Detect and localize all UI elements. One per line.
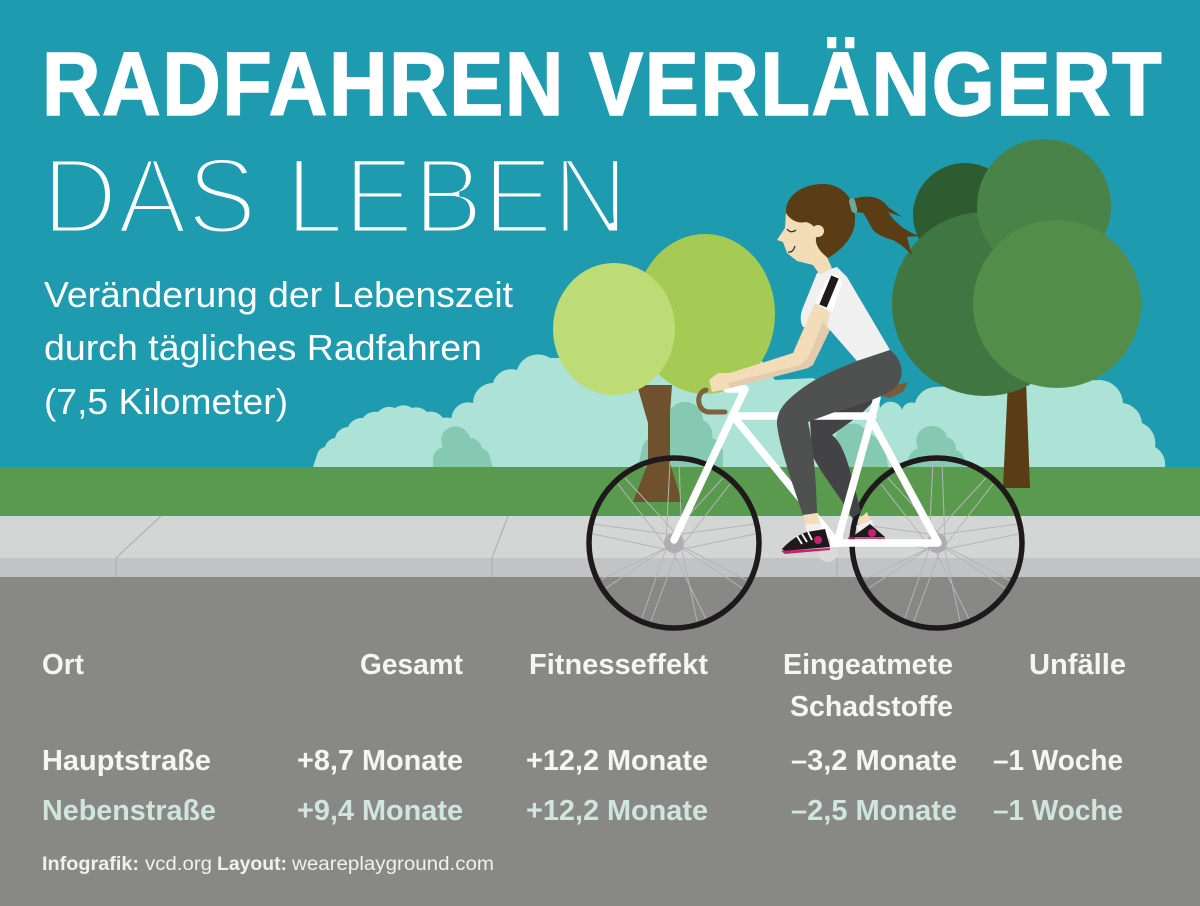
table header row (42, 649, 1126, 723)
small bush: behind frame (822, 424, 888, 467)
credits: vcd.org (145, 854, 212, 875)
credits (42, 854, 494, 875)
rider: front ankle and shoe (781, 513, 843, 554)
subtitle: durch tägliches Radfahren (44, 327, 482, 368)
tree: right trunk (1003, 380, 1030, 488)
small bush: left (433, 426, 493, 467)
rider: back leg (810, 395, 880, 534)
table row: Hauptstraße: –3,2 Monate (791, 745, 957, 777)
bicycle down tube (733, 416, 837, 543)
subtitle: Veränderung der Lebenszeit (44, 274, 513, 315)
rider: sleeve (815, 274, 842, 312)
table row: Nebenstraße (42, 795, 1123, 827)
rider: torso (801, 267, 890, 361)
road (0, 577, 1200, 906)
table row: Nebenstraße: –1 Woche (993, 795, 1123, 827)
pedal and crank (818, 542, 838, 562)
rider: head (777, 184, 920, 275)
table header row: Eingeatmete (783, 649, 953, 681)
table row: Hauptstraße: +12,2 Monate (526, 745, 708, 777)
subtitle (44, 274, 513, 422)
sidewalk (0, 516, 1200, 577)
table header row: Ort (42, 649, 84, 681)
rider: back shoe (848, 524, 885, 538)
credits: Infografik: (42, 854, 139, 875)
small bush: behind front wheel (638, 402, 723, 467)
hedge: large background (451, 354, 1165, 467)
table header row: Gesamt (360, 649, 463, 681)
table row: Hauptstraße: Hauptstraße (42, 745, 211, 777)
table row: Nebenstraße: –2,5 Monate (791, 795, 957, 827)
tree: right crown (892, 139, 1141, 396)
table header row: Unfälle (1029, 649, 1126, 681)
handlebar (699, 390, 725, 412)
table row: Nebenstraße: Nebenstraße (42, 795, 216, 827)
table row: Nebenstraße: +12,2 Monate (526, 795, 708, 827)
table header row: Fitnesseffekt (529, 649, 708, 681)
table row: Hauptstraße: –1 Woche (993, 745, 1123, 777)
credits: weareplayground.com (291, 854, 494, 875)
subtitle: (7,5 Kilometer) (44, 381, 288, 422)
rider: arm (709, 303, 830, 392)
hedge: left (313, 405, 470, 467)
table row: Hauptstraße: +8,7 Monate (297, 745, 463, 777)
title line 1: RADFAHREN VERLÄNGERT (42, 34, 1162, 135)
bicycle frame (674, 389, 938, 543)
tree: left trunk (633, 385, 682, 502)
table row: Nebenstraße: +9,4 Monate (297, 795, 463, 827)
grass strip (0, 467, 1200, 516)
rider: front leg (777, 350, 902, 516)
saddle (882, 382, 908, 398)
credits: Layout: (217, 854, 287, 875)
small bush: right (907, 426, 965, 467)
tree: left crown (553, 234, 775, 395)
table header row: Schadstoffe (790, 691, 953, 723)
title line 2: DAS LEBEN (42, 135, 628, 256)
table row: Hauptstraße (42, 745, 1123, 777)
bicycle wheels (589, 458, 1022, 628)
